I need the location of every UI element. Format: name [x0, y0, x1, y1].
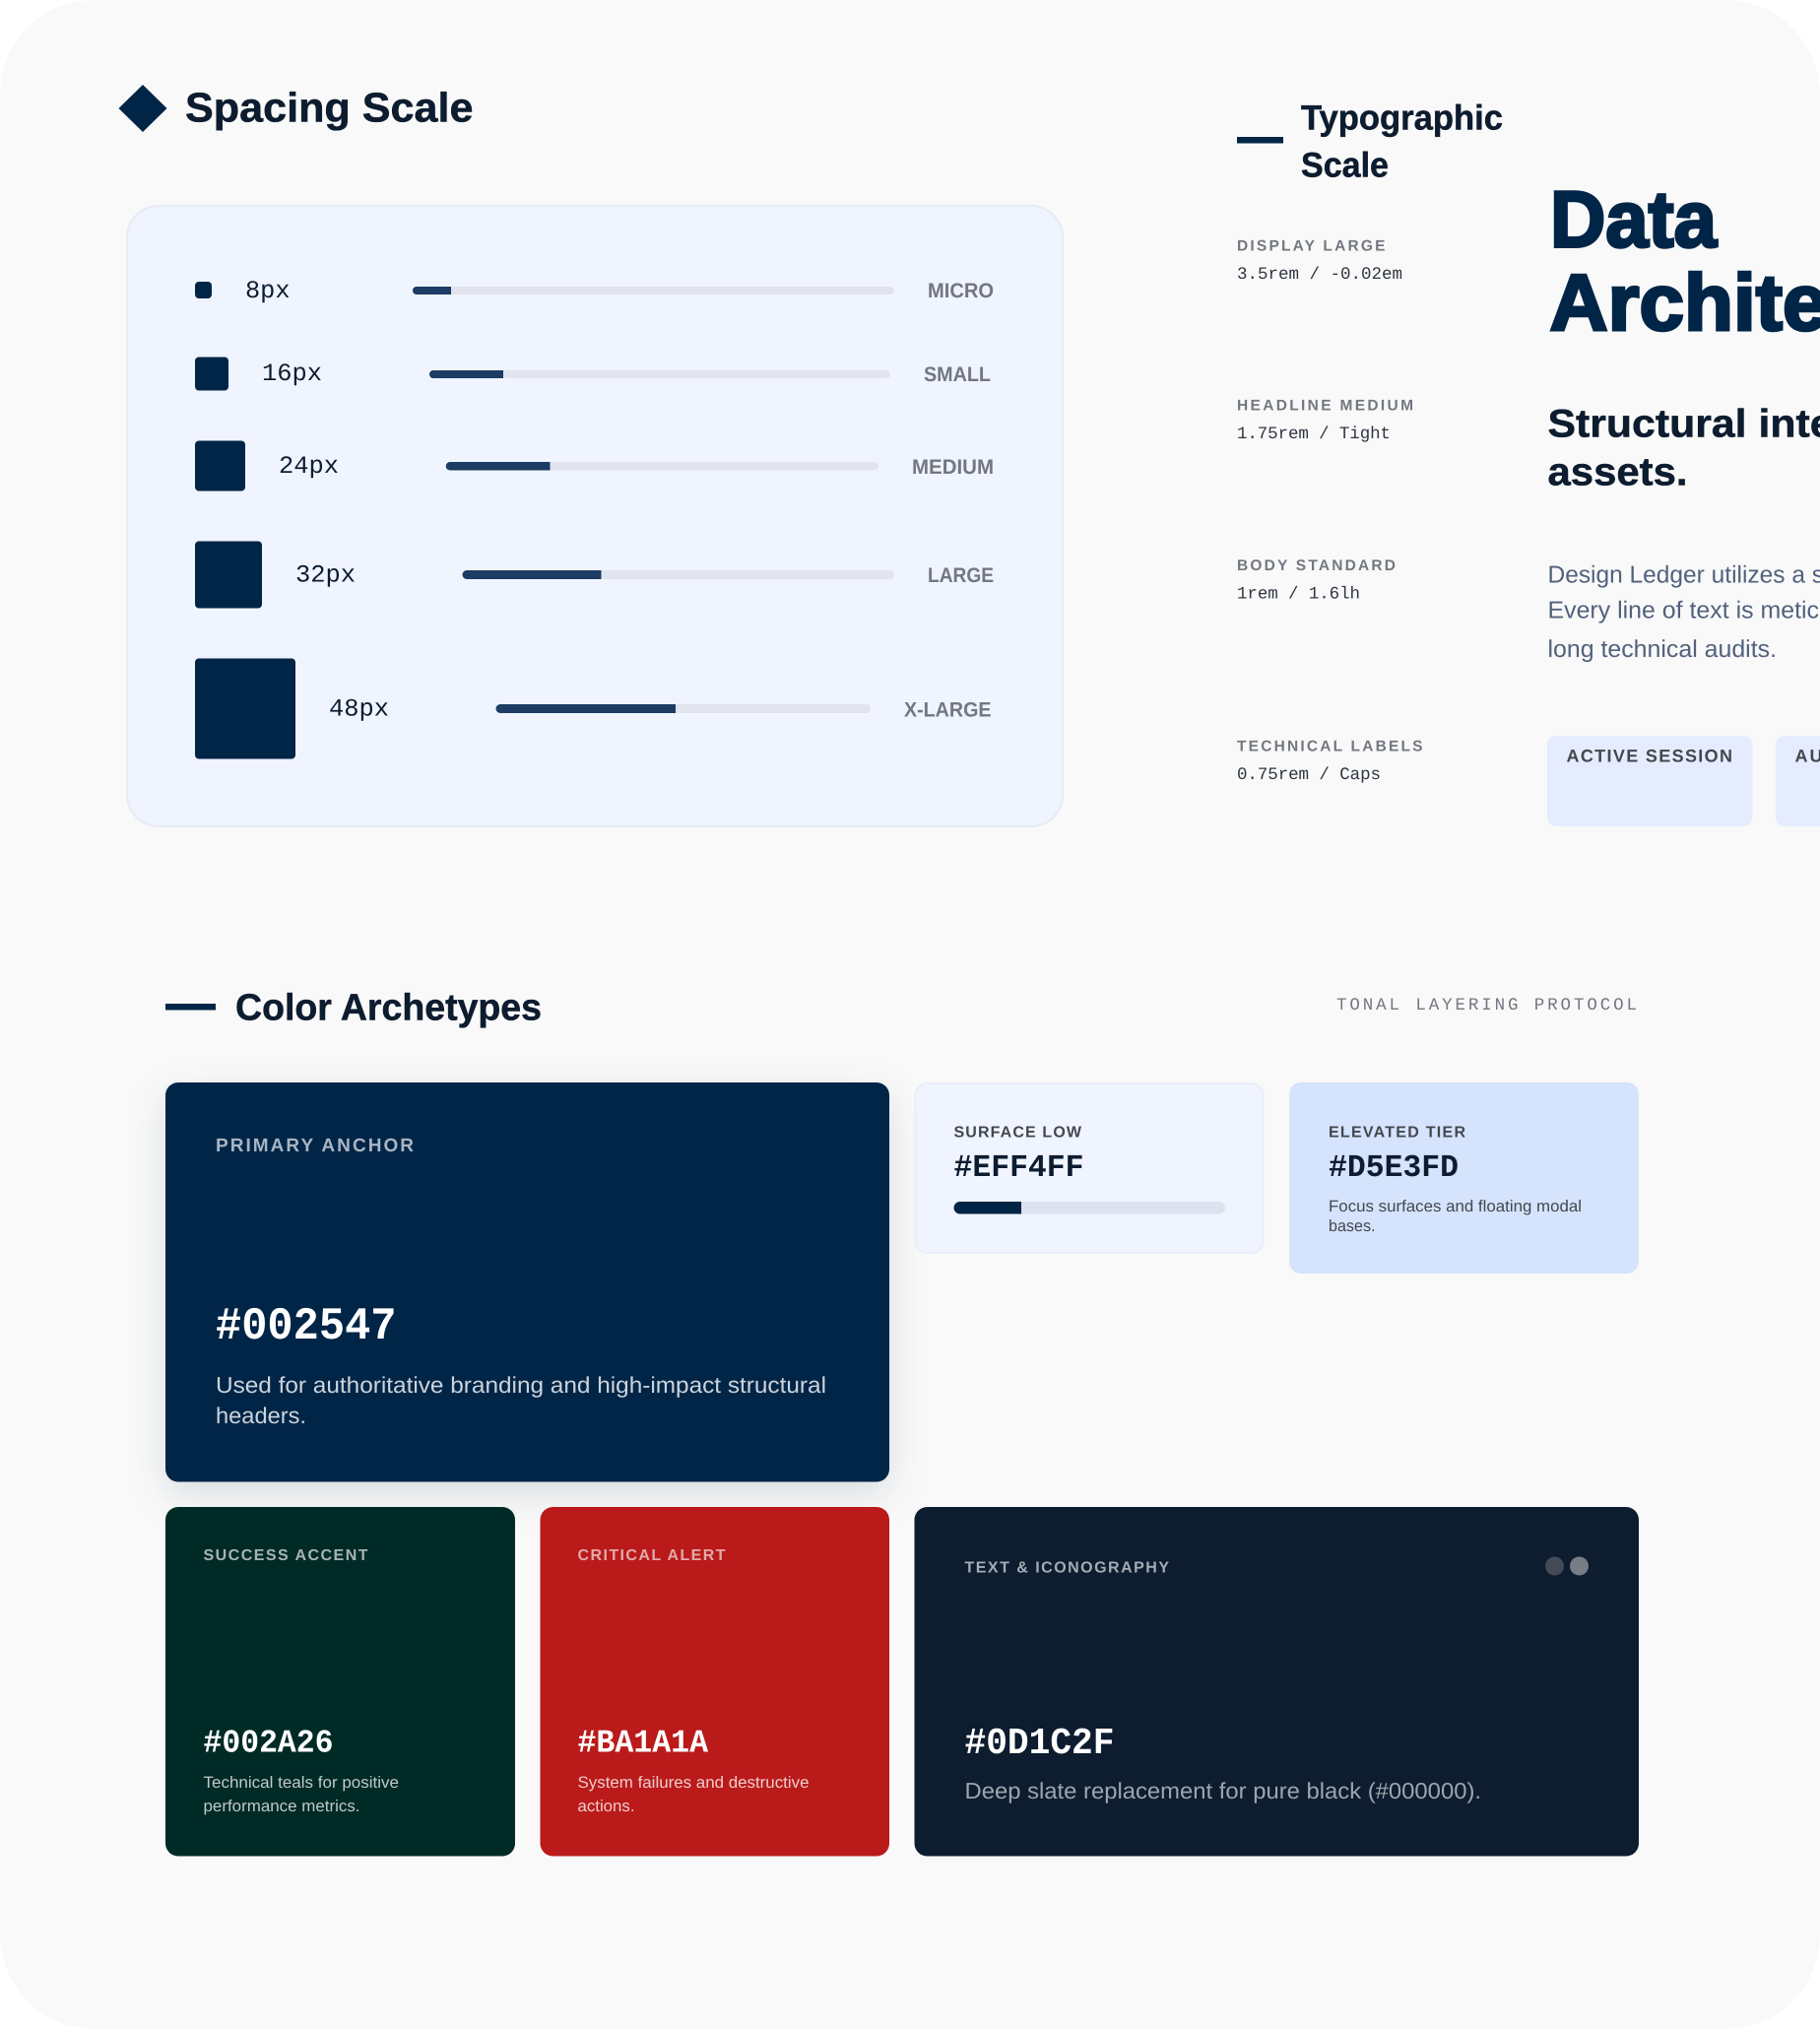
row: 8px micro: MICRO	[928, 280, 994, 302]
row: 48px x-large	[195, 658, 991, 758]
card: surface low: SURFACE LOW	[953, 1125, 1082, 1141]
spec: headline medium	[1237, 398, 1413, 444]
row: 8px micro	[195, 277, 994, 305]
card: elevated tier: #D5E3FD	[1329, 1149, 1459, 1186]
row: 32px large: 32px	[295, 561, 356, 589]
sample: body standard	[1548, 561, 1820, 663]
spec: headline medium: HEADLINE MEDIUM	[1237, 398, 1413, 414]
card: surface low: #EFF4FF	[953, 1149, 1083, 1186]
card: primary anchor: headers.	[216, 1403, 306, 1428]
row: 32px large	[195, 542, 994, 609]
card: primary anchor: Used for authoritative branding and high-impact structural	[216, 1372, 826, 1398]
sample: body standard: Design Ledger utilizes a s	[1548, 561, 1820, 589]
icon: diamond	[118, 85, 167, 132]
card: critical alert: actions.	[577, 1798, 634, 1815]
panel: spacing tokens	[127, 206, 1063, 826]
section: color archetypes	[165, 987, 1639, 1856]
card: primary anchor	[165, 1082, 889, 1481]
card: critical alert: CRITICAL ALERT	[577, 1547, 726, 1564]
card: success accent: #002A26	[203, 1726, 333, 1761]
spec: display large: 3.5rem / -0.02em	[1237, 265, 1402, 285]
row: 24px medium: 24px	[279, 452, 339, 481]
sample: headline medium	[1548, 402, 1820, 494]
card: critical alert: #BA1A1A	[577, 1726, 708, 1761]
heading: color archetypes: Color Archetypes	[235, 987, 542, 1028]
card: text and iconography: TEXT & ICONOGRAPHY	[965, 1560, 1169, 1576]
spec: body standard	[1237, 557, 1396, 605]
card: text and iconography: #0D1C2F	[965, 1723, 1115, 1765]
spec: body standard: 1rem / 1.6lh	[1237, 585, 1360, 605]
sample: display large: Archite	[1550, 259, 1820, 348]
section: spacing scale	[118, 85, 1063, 826]
spec: technical labels: TECHNICAL LABELS	[1237, 739, 1422, 754]
row: 24px medium	[195, 441, 994, 491]
sample: body standard: long technical audits.	[1548, 636, 1777, 663]
card: success accent	[165, 1507, 515, 1856]
sample: headline medium: assets.	[1548, 451, 1688, 494]
card: text and iconography	[914, 1507, 1639, 1856]
card: critical alert	[540, 1507, 889, 1856]
tag: active session: ACTIVE SESSION	[1566, 747, 1732, 766]
card: success accent: performance metrics.	[203, 1798, 360, 1815]
tag: clipped second tag	[1776, 736, 1820, 826]
caption: tonal layering protocol: TONAL LAYERING PROTOCOL	[1336, 996, 1637, 1015]
sample: headline medium: Structural inte	[1548, 402, 1820, 445]
spec: technical labels: 0.75rem / Caps	[1237, 765, 1381, 785]
card: primary anchor: #002547	[216, 1300, 396, 1352]
heading: typographic scale: Typographic	[1301, 98, 1503, 138]
heading: spacing scale: Spacing Scale	[185, 85, 473, 130]
spec: display large: DISPLAY LARGE	[1237, 238, 1385, 254]
spec: body standard: BODY STANDARD	[1237, 557, 1396, 574]
row: 48px x-large: 48px	[329, 695, 389, 723]
row: 48px x-large: X-LARGE	[904, 699, 991, 721]
row: 32px large: LARGE	[928, 564, 994, 587]
card: success accent: SUCCESS ACCENT	[203, 1547, 368, 1564]
card: elevated tier: bases.	[1329, 1217, 1375, 1235]
card: success accent: Technical teals for positive	[203, 1774, 399, 1792]
heading: typographic scale	[1237, 98, 1503, 185]
card: critical alert: System failures and destructive	[577, 1774, 810, 1792]
card: elevated tier: Focus surfaces and floating modal	[1329, 1198, 1582, 1215]
icon: two dots	[1545, 1556, 1589, 1576]
section: typographic scale	[1237, 98, 1820, 826]
card: text and iconography: Deep slate replacement for pure black (#000000).	[965, 1778, 1481, 1803]
card: elevated tier: ELEVATED TIER	[1329, 1125, 1465, 1141]
spec: technical labels	[1237, 739, 1422, 785]
card: elevated tier	[1289, 1082, 1639, 1274]
sample: display large: Data	[1550, 175, 1718, 264]
row: 16px small: 16px	[262, 360, 322, 388]
card: surface low	[916, 1083, 1263, 1253]
sample: body standard: Every line of text is metic	[1548, 597, 1819, 624]
tag: active session	[1547, 736, 1753, 826]
progress bar	[953, 1202, 1225, 1213]
row: 24px medium: MEDIUM	[912, 456, 994, 479]
row: 16px small: SMALL	[924, 363, 991, 386]
row: 16px small	[195, 357, 991, 390]
card: primary anchor: PRIMARY ANCHOR	[216, 1136, 414, 1156]
spec: headline medium: 1.75rem / Tight	[1237, 425, 1391, 444]
row: 8px micro: 8px	[245, 277, 290, 305]
heading: typographic scale: Scale	[1301, 146, 1389, 185]
sample: display large	[1550, 175, 1820, 348]
spec: display large	[1237, 238, 1402, 285]
